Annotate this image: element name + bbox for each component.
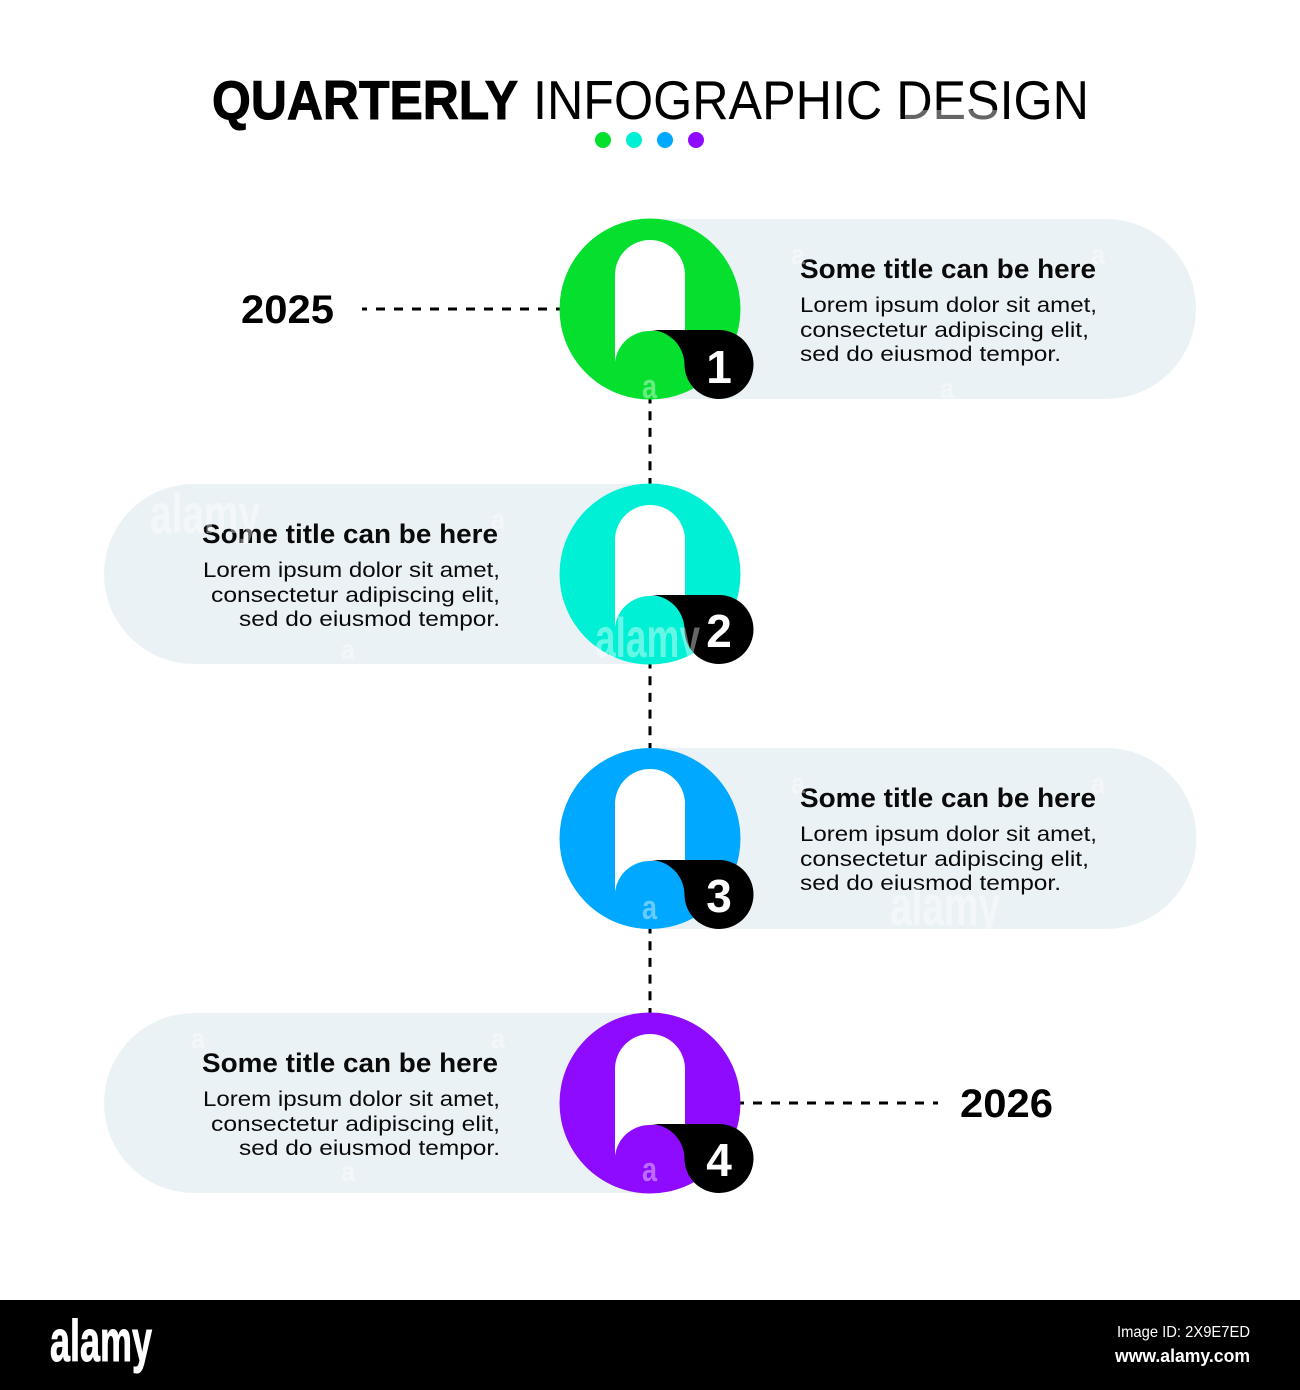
step 1 background pill [650,219,1196,399]
watermarks: a [491,504,505,535]
year label: 2025: 2025 [241,288,334,332]
icon: step 4 circle: 4 [706,1134,732,1186]
title: INFOGRAPHIC DESIGN [533,69,1089,131]
step 3 text: Lorem ipsum dolor sit amet, [800,822,1097,846]
step 4 text [202,1048,500,1160]
panel: step 4 [104,1012,753,1194]
watermarks: a [341,634,355,665]
step 3 text [800,783,1097,895]
watermarks: a [1091,768,1105,799]
step 2 text: Some title can be here [202,519,498,549]
title [212,69,1089,131]
step 1 text: sed do eiusmod tempor. [800,342,1061,366]
colour dots [595,132,704,148]
step 2 background pill [104,484,650,664]
step 1 text: Some title can be here [800,254,1096,284]
icon: step 4 circle [560,1012,753,1194]
watermarks [150,239,1105,1189]
footer image id: Image ID: 2X9E7ED [1117,1324,1250,1341]
watermarks: a [642,889,658,927]
step 3 text: sed do eiusmod tempor. [800,871,1061,895]
panel: step 1 [560,218,1196,400]
icon: step 2 circle [560,484,753,664]
watermarks: a [491,1023,505,1054]
icon: step 1 circle [560,218,753,400]
year label: 2026: 2026 [960,1082,1053,1126]
watermarks: a [191,1023,205,1054]
footer website: www.alamy.com [1114,1346,1250,1366]
watermarks: alamy [150,482,260,545]
watermarks: a [791,768,805,799]
icon: step 3 circle [560,748,753,929]
step 4 text: Lorem ipsum dolor sit amet, [203,1087,500,1111]
watermarks: a [791,239,805,270]
icon: step 3 circle: 3 [706,870,732,922]
step 1 text [800,254,1097,366]
step 2 text [202,519,500,631]
step 3 text: Some title can be here [800,783,1096,813]
step 2 text: Lorem ipsum dolor sit amet, [203,558,500,582]
step 4 text: consectetur adipiscing elit, [211,1112,500,1136]
footer bar [0,1300,1300,1390]
watermarks: a [642,368,658,406]
watermarks: alamy [890,874,1000,937]
watermarks: alamy [595,606,700,669]
dashed timeline connectors [362,309,938,1103]
step 4 text: Some title can be here [202,1048,498,1078]
step 4 background pill [104,1013,650,1193]
step 2 text: sed do eiusmod tempor. [239,607,500,631]
watermarks: a [642,1151,658,1189]
step 1 text: consectetur adipiscing elit, [800,318,1089,342]
step 3 background pill [650,748,1196,929]
panel: step 2 [104,484,753,664]
watermarks: a [1091,239,1105,270]
title: QUARTERLY [212,69,518,131]
step 4 text: sed do eiusmod tempor. [239,1136,500,1160]
watermarks: a [940,373,954,404]
step 1 text: Lorem ipsum dolor sit amet, [800,293,1097,317]
watermarks: a [341,1156,355,1187]
icon: step 1 circle: 1 [706,341,732,393]
panel: step 3 [560,748,1196,929]
step 3 text: consectetur adipiscing elit, [800,847,1089,871]
step 2 text: consectetur adipiscing elit, [211,583,500,607]
icon: step 2 circle: 2 [706,605,732,657]
footer logo: alamy [50,1309,152,1374]
